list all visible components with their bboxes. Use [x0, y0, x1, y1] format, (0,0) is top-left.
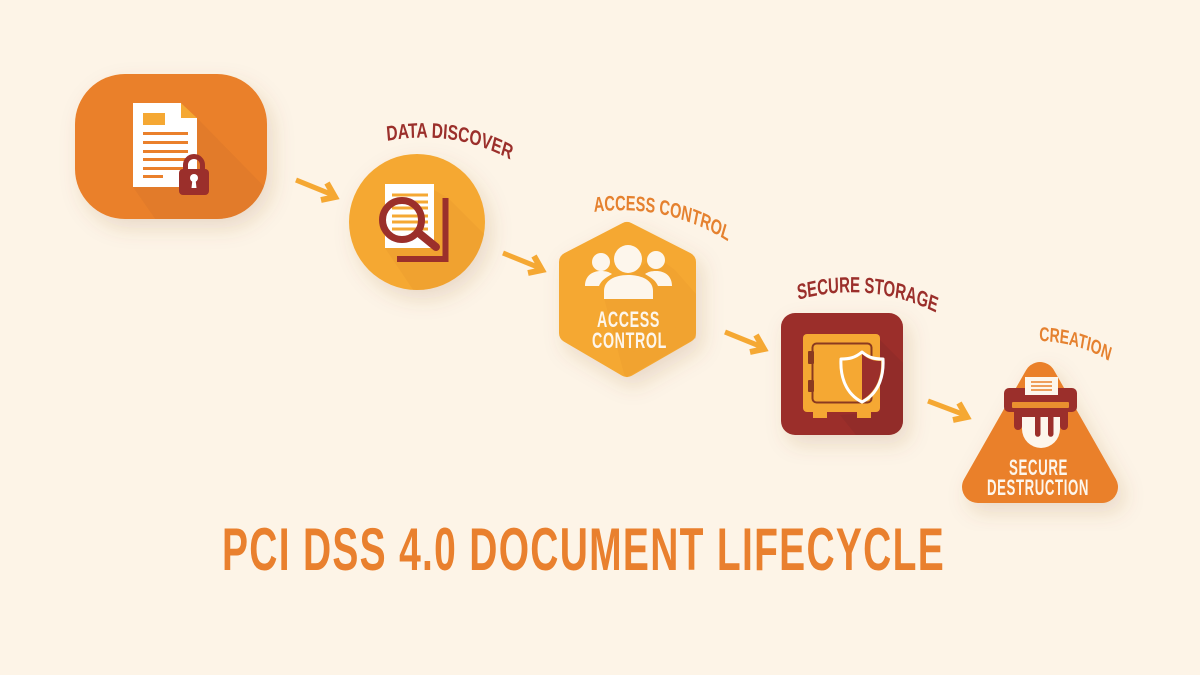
icon: document	[133, 103, 197, 187]
step 5: secure destruction triangle	[978, 377, 1102, 500]
step 5 label: CREATION	[1040, 327, 1112, 361]
icon: padlock	[179, 156, 209, 195]
icon: shredder	[1004, 377, 1077, 448]
step 4 label: SECURE STORAGE	[798, 277, 938, 312]
badge text	[987, 455, 1089, 500]
icon: document with magnifier	[382, 184, 446, 259]
icon: shield	[841, 352, 883, 402]
arrow 3	[725, 332, 764, 352]
badge text: ACCESS	[597, 307, 660, 332]
arrow 4	[928, 401, 967, 420]
icon: people	[585, 245, 672, 299]
badge text: SECURE	[1009, 455, 1068, 480]
arrow 1	[296, 180, 335, 200]
step 4: secure storage square	[781, 313, 910, 440]
icon: safe	[803, 334, 880, 418]
badge text	[592, 307, 667, 353]
step 2: data discovery circle	[349, 154, 500, 300]
step 3 label: ACCESS CONTROL	[594, 196, 728, 242]
step 3: access control hexagon	[569, 232, 710, 385]
badge text: DESTRUCTION	[987, 475, 1089, 500]
arrow 2	[503, 253, 542, 273]
badge text: CONTROL	[592, 328, 667, 353]
step 2 label: DATA DISCOVER	[386, 123, 513, 160]
step 1: document with lock badge	[75, 74, 290, 240]
